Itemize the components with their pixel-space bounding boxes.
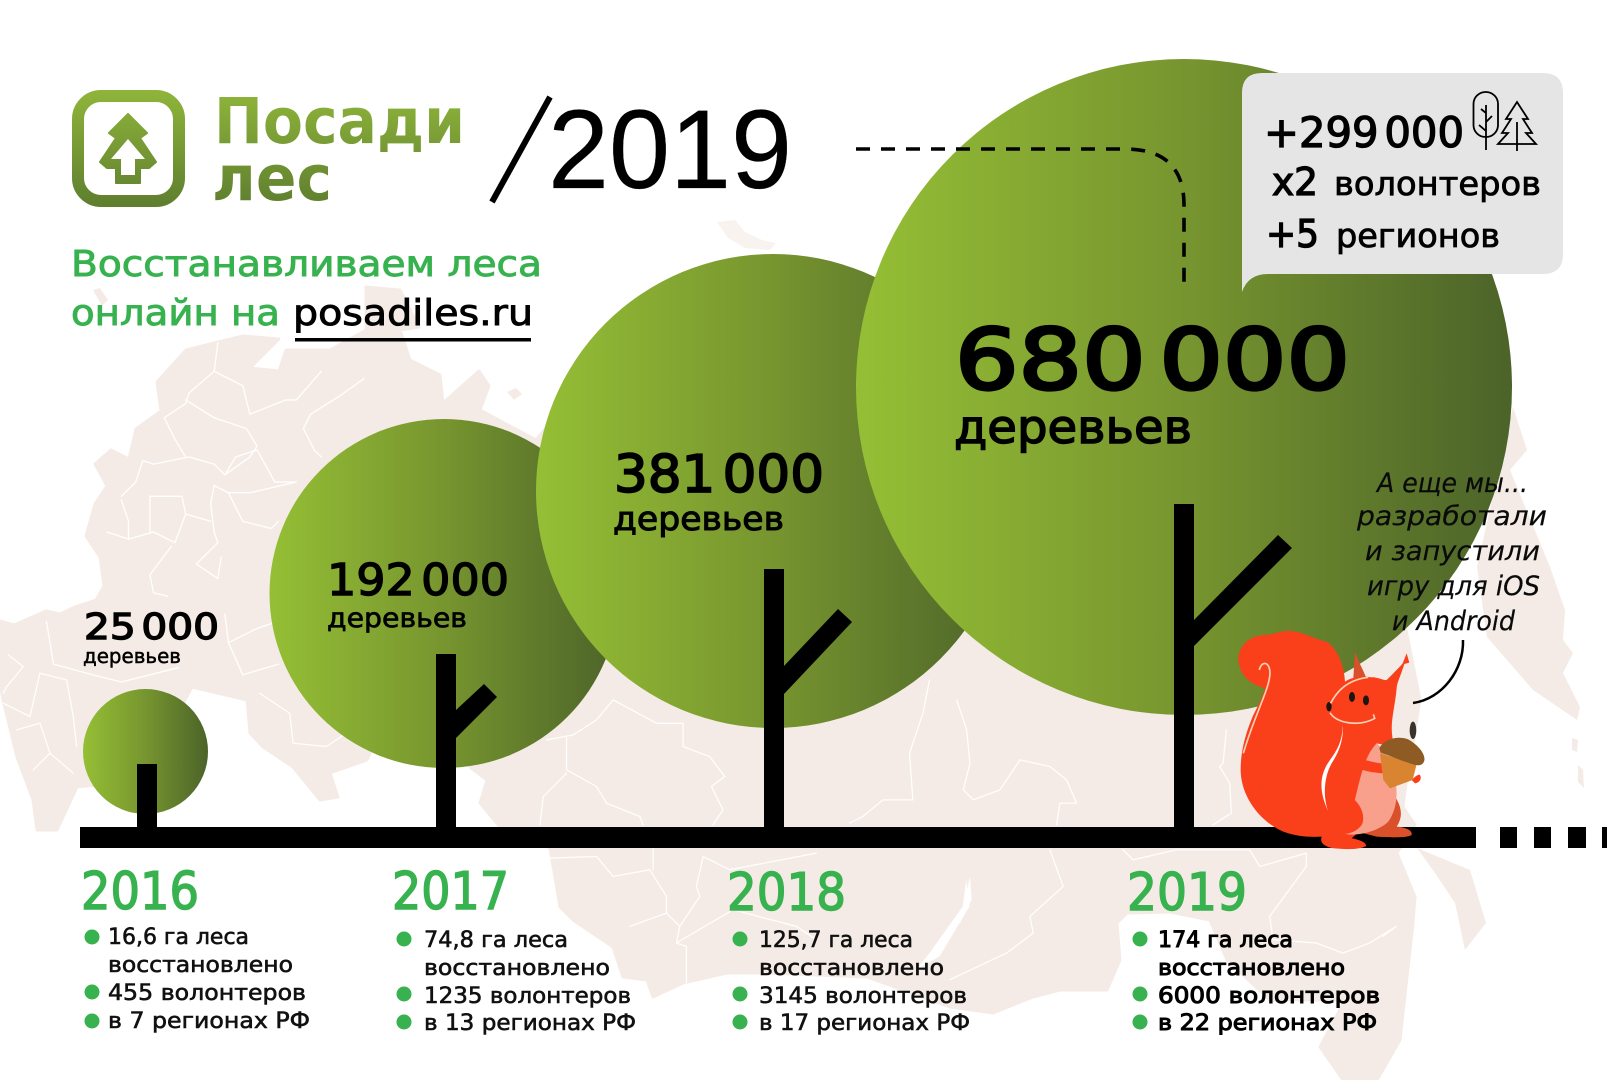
squirrel xyxy=(1238,631,1424,849)
circle 2019 xyxy=(856,59,1512,715)
2017 stats xyxy=(392,862,636,1036)
handwritten note: игру для iOS xyxy=(1367,571,1540,602)
icon: trees xyxy=(1474,92,1536,151)
2018 stats: 3145 волонтеров xyxy=(759,984,967,1009)
handwritten note: А еще мы... xyxy=(1375,468,1528,499)
2019 stats: в 22 регионах РФ xyxy=(1158,1011,1377,1036)
2016 stats: в 7 регионах РФ xyxy=(108,1009,310,1034)
metric: 680 000 trees xyxy=(954,311,1350,454)
2019 stats: 174 га леса xyxy=(1158,928,1293,953)
metric: 381 000 trees: деревьев xyxy=(613,499,784,538)
note pointer xyxy=(1413,640,1463,703)
metric: 381 000 trees xyxy=(613,445,824,538)
callout: 2019 growth: регионов xyxy=(1336,216,1500,255)
logo wordmark xyxy=(212,85,465,215)
2017 stats: 2017 xyxy=(392,862,509,922)
tree trunks xyxy=(137,504,1292,830)
metric: 680 000 trees: деревьев xyxy=(954,400,1192,454)
2018 stats: 2018 xyxy=(727,863,846,923)
2017 stats: 74,8 га леса xyxy=(424,928,568,953)
2019 stats: 6000 волонтеров xyxy=(1158,984,1380,1009)
logo wordmark: лес xyxy=(212,142,332,215)
metric: 192 000 trees xyxy=(327,555,509,634)
2018 stats: 125,7 га леса xyxy=(759,928,913,953)
handwritten note: и запустили xyxy=(1365,536,1540,567)
2018 stats: в 17 регионах РФ xyxy=(759,1011,970,1036)
handwritten note xyxy=(1356,468,1547,637)
callout: 2019 growth: x2 xyxy=(1272,160,1318,204)
metric: 192 000 trees: деревьев xyxy=(327,603,467,634)
metric: 25 000 trees: 25 000 xyxy=(84,607,219,648)
handwritten note: и Android xyxy=(1392,606,1516,637)
2017 stats: 1235 волонтеров xyxy=(424,984,631,1009)
tagline: Восстанавливаем леса xyxy=(71,244,542,285)
metric: 680 000 trees: 680 000 xyxy=(955,311,1350,409)
callout: 2019 growth: +5 xyxy=(1266,212,1319,256)
dashed connector xyxy=(856,149,1184,291)
callout: 2019 growth: +299 000 xyxy=(1264,108,1464,157)
circle 2016 xyxy=(83,689,208,814)
logo xyxy=(78,85,465,215)
tagline: онлайн на xyxy=(71,293,280,334)
2016 stats: 455 волонтеров xyxy=(108,981,306,1006)
logo icon xyxy=(78,96,179,201)
handwritten note: разработали xyxy=(1356,501,1547,532)
2017 stats: восстановлено xyxy=(424,956,610,981)
circle 2018 xyxy=(536,254,1010,728)
2016 stats: восстановлено xyxy=(108,953,293,978)
circle 2017 xyxy=(270,419,618,768)
2018 stats xyxy=(727,863,970,1036)
2018 stats: восстановлено xyxy=(759,956,944,981)
metric: 192 000 trees: 192 000 xyxy=(327,555,509,606)
2017 stats: в 13 регионах РФ xyxy=(424,1011,636,1036)
2019 stats: восстановлено xyxy=(1158,956,1345,981)
website link: posadiles.ru xyxy=(293,293,533,334)
2016 stats: 16,6 га леса xyxy=(108,925,249,950)
2019 stats xyxy=(1127,863,1380,1036)
metric: 25 000 trees xyxy=(83,607,219,668)
2016 stats xyxy=(81,862,310,1034)
timeline axis xyxy=(80,827,1607,848)
logo wordmark: Посади xyxy=(214,85,465,158)
callout: 2019 growth: волонтеров xyxy=(1334,164,1541,203)
tagline xyxy=(71,244,542,342)
2019 stats: 2019 xyxy=(1127,863,1247,923)
metric: 381 000 trees: 381 000 xyxy=(614,445,824,505)
title: /2019: 2019 xyxy=(548,87,792,212)
callout: 2019 growth xyxy=(1242,73,1563,292)
2016 stats: 2016 xyxy=(81,862,199,922)
metric: 25 000 trees: деревьев xyxy=(83,644,181,668)
